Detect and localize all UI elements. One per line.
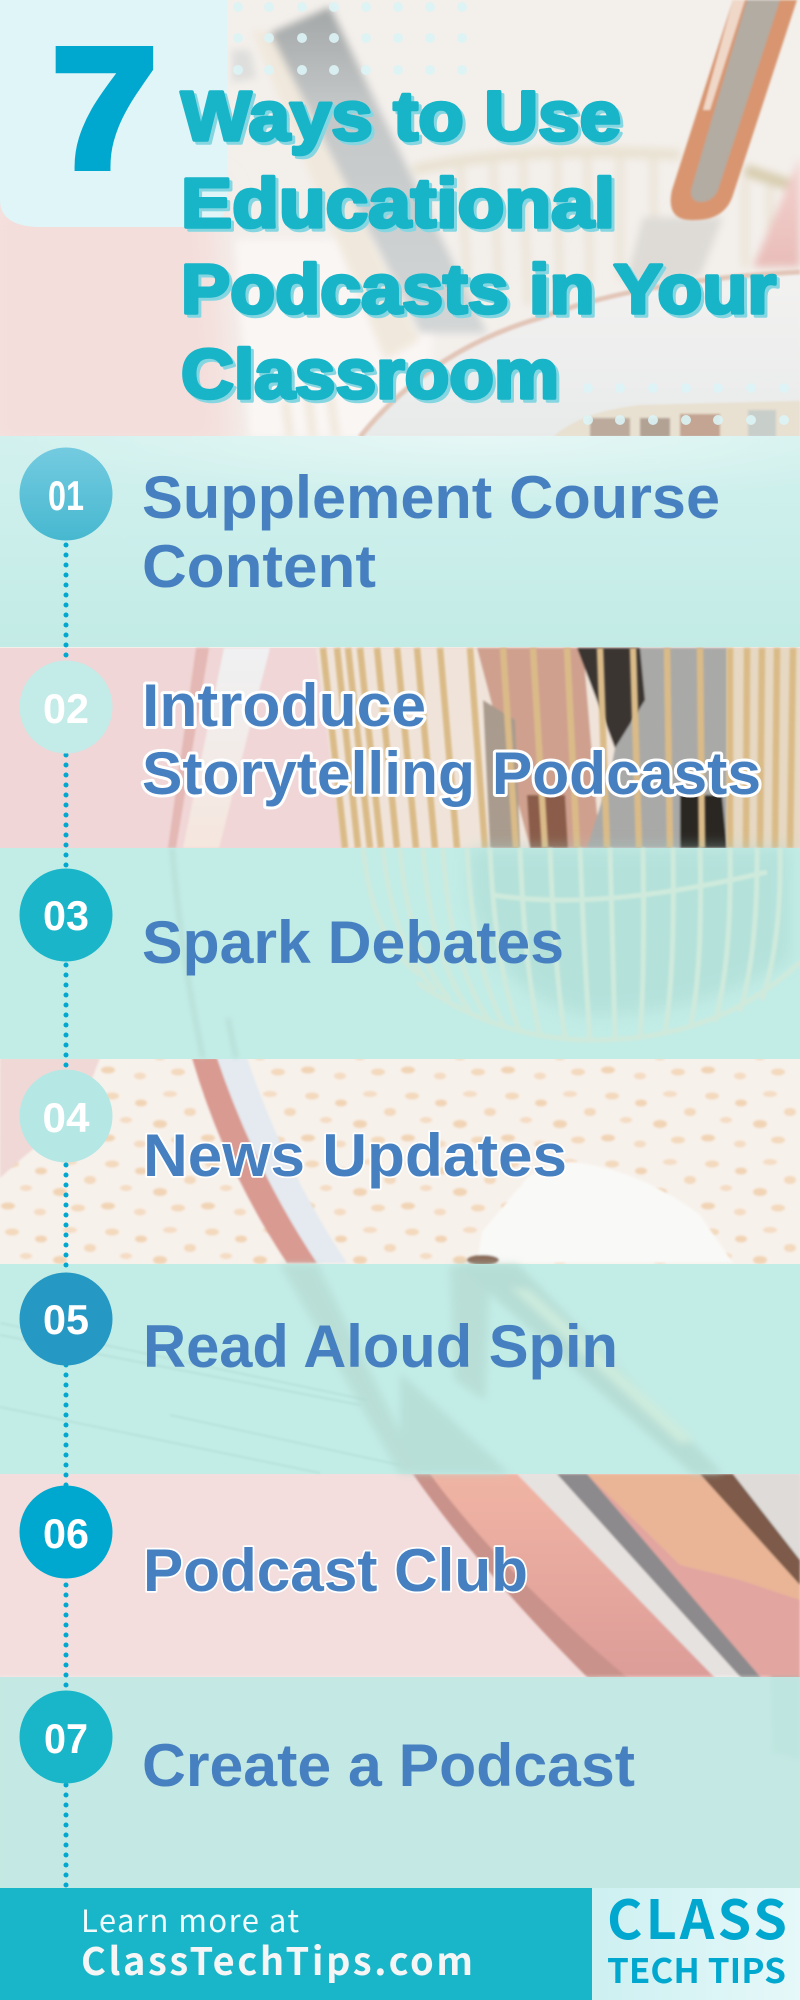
title: Ways to Use: [184, 80, 624, 158]
step 6: Podcast Club: [143, 1537, 528, 1604]
step 6: 06: [43, 1510, 89, 1557]
panel: top-left number block: [0, 0, 227, 227]
title: [181, 77, 779, 416]
title: Podcasts in Your: [184, 253, 779, 331]
title: Classroom: [184, 338, 562, 416]
step 3: [20, 868, 564, 976]
step 4: 04: [42, 1094, 90, 1141]
title: Educational: [184, 167, 618, 245]
photo: rose-gold phone on pink desk: [0, 1474, 800, 1680]
step 2: Storytelling Podcasts: [142, 740, 761, 807]
panel: band 5 with pages and phone seen through the tint: [0, 1264, 800, 1474]
photo: page surface under band 5: [0, 1264, 800, 1476]
step 4: News Updates: [143, 1122, 567, 1189]
step 7: 07: [44, 1715, 88, 1762]
dotted timeline connector: [64, 545, 68, 1886]
big number seven: 7: [52, 14, 157, 204]
step 3: Spark Debates: [142, 909, 564, 976]
step 3: 03: [43, 892, 89, 939]
title: Ways to Use: [181, 77, 621, 155]
title: Educational: [181, 164, 615, 242]
step 2: 02: [43, 685, 89, 732]
photo: pink desk with gold basket: [0, 648, 800, 1060]
panel: band 7: [0, 1677, 800, 1888]
title: Podcasts in Your: [181, 250, 776, 328]
step 4: [20, 1070, 567, 1189]
photo: polka-dot fabric with rose curve: [0, 1058, 800, 1268]
footer: learn more call to action: Learn more at: [81, 1896, 299, 1941]
step 1: Supplement Course: [142, 464, 720, 531]
footer: learn more call to action: ClassTechTips.com: [81, 1931, 473, 1986]
step 2: Introduce: [142, 672, 426, 739]
step 2: [20, 660, 761, 807]
step 7: Create a Podcast: [142, 1732, 635, 1799]
footer: Class Tech Tips logo: [592, 1876, 800, 2000]
step 1: [20, 448, 720, 600]
footer: Class Tech Tips logo: CLASS: [607, 1876, 787, 1955]
step 1: 01: [48, 472, 84, 519]
step 5: 05: [43, 1296, 89, 1343]
photo: bottom phone corner: [0, 1678, 800, 1890]
step 6: [20, 1486, 528, 1604]
panel: band 1: [0, 436, 800, 647]
photo: header desk scene: [0, 0, 800, 460]
step 1: Content: [142, 533, 376, 600]
footer: learn more call to action: [0, 1888, 592, 2000]
title: Classroom: [181, 335, 559, 413]
panel: band 3 with basket seen through the tint: [0, 848, 800, 1059]
decorative dot grids: [233, 2, 789, 425]
footer: Class Tech Tips logo: TECH TIPS: [607, 1944, 786, 1993]
step 5: Read Aloud Spin: [143, 1313, 618, 1380]
step 5: [20, 1272, 618, 1380]
step 7: [20, 1690, 635, 1799]
